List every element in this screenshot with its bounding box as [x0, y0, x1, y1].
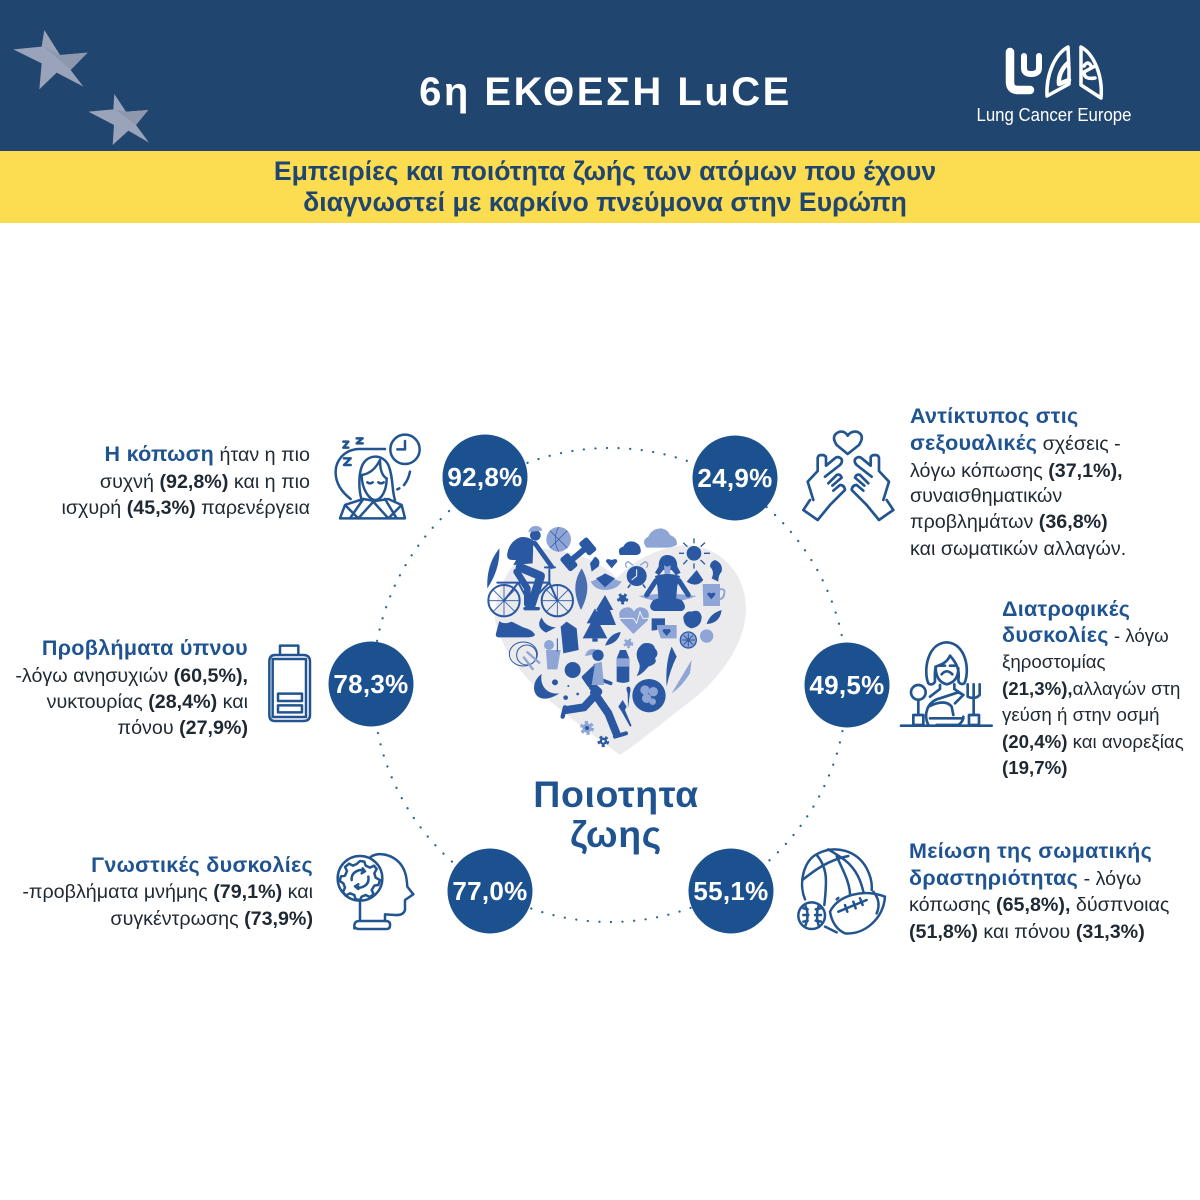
broccoli: [637, 643, 657, 676]
text: sexual relations: προβλημάτων (36,8%): [910, 511, 1108, 533]
badge: 92,8%: [442, 434, 528, 520]
ball: [565, 662, 581, 678]
central heading: [533, 773, 699, 855]
text: fatigue: συχνή (92,8%) και η πιο: [100, 471, 310, 493]
subtitle: Εμπειρίες και ποιότητα ζωής των ατόμων που έχουν: [274, 156, 936, 186]
juice glass: [544, 638, 561, 669]
logo: Lung Cancer Europe: Lung Cancer Europe: [976, 105, 1132, 125]
icon: woman eating: [901, 642, 992, 726]
badge: 49,5%: 49,5%: [809, 670, 885, 700]
trees: [583, 595, 616, 642]
icon: EU stars: [13, 30, 149, 145]
text: reduced physical activity: Μείωση της σωματικής: [909, 839, 1152, 863]
meditating woman: [639, 555, 697, 611]
text: cognitive difficulties: συγκέντρωσης (73,9%): [110, 908, 313, 930]
text: sleep problems: πόνου (27,9%): [118, 717, 248, 739]
text: nutrition difficulties: γεύση ή στην οσμή: [1002, 704, 1160, 725]
wheat: [575, 568, 587, 610]
spoon and fork: [626, 687, 631, 708]
text: sexual relations: [910, 404, 1126, 560]
plate: [632, 679, 666, 712]
smoothie: [561, 622, 579, 653]
text: nutrition difficulties: [1002, 597, 1184, 778]
text: nutrition difficulties: δυσκολίες - λόγω: [1002, 623, 1169, 647]
icon: head with gear: [338, 854, 413, 929]
badge: 78,3%: [328, 642, 414, 726]
subtitle: διαγνωστεί με καρκίνο πνεύμονα στην Ευρώπη: [303, 187, 907, 217]
heart illustration: [487, 526, 746, 755]
pea pod and carrot: [666, 647, 677, 687]
text: nutrition difficulties: ξηροστομίας: [1002, 651, 1106, 672]
badge: 77,0%: [448, 848, 532, 934]
mug: [703, 584, 724, 606]
dumbbell: [559, 537, 597, 572]
text: cognitive difficulties: Γνωστικές δυσκολίες: [91, 853, 313, 877]
speech bubbles: [652, 618, 665, 631]
leaf, flower: [605, 632, 621, 646]
subtitle band: [0, 151, 1200, 223]
bottle: [617, 650, 629, 683]
text: sexual relations: και σωματικών αλλαγών.: [910, 538, 1126, 560]
subtitle: [274, 156, 936, 217]
text: fatigue: [61, 442, 310, 519]
lotus: [591, 573, 622, 590]
text: nutrition difficulties: (21,3%),αλλαγών στη: [1002, 678, 1180, 699]
icon: low battery: [269, 646, 310, 721]
badge: 55,1%: 55,1%: [693, 876, 769, 906]
text: sexual relations: Αντίκτυπος στις: [910, 404, 1078, 428]
heart background: [495, 545, 746, 755]
text: sleep problems: Προβλήματα ύπνου: [42, 636, 248, 660]
jump rope: [509, 642, 540, 670]
flower: [619, 595, 626, 602]
badge: 49,5%: [804, 642, 890, 728]
title: 6η ΕΚΘΕΣΗ LuCE: [419, 70, 792, 114]
plant and heart: [590, 557, 599, 572]
bottom flowers: [582, 723, 592, 733]
text: fatigue: ισχυρή (45,3%) παρενέργεια: [61, 497, 310, 519]
wheat left: [487, 548, 499, 588]
runner: [563, 649, 626, 737]
orange slice and steam: [687, 570, 703, 585]
text: sexual relations: σεξουαλικές σχέσεις -: [910, 431, 1121, 455]
badge: 92,8%: 92,8%: [447, 462, 523, 492]
cyclist: [488, 526, 573, 616]
text: reduced physical activity: (51,8%) και πόνου (31,3%): [909, 921, 1145, 943]
text: reduced physical activity: [909, 839, 1169, 943]
moon and stars: [534, 674, 579, 700]
text: cognitive difficulties: [22, 853, 313, 930]
icon: sleeping woman with clock: [336, 435, 420, 518]
melon slice: [539, 617, 556, 633]
text: sleep problems: [15, 636, 248, 739]
badge: 55,1%: [688, 848, 774, 934]
clouds: [619, 541, 641, 555]
text: cognitive difficulties: -προβλήματα μνήμης (79,1%) και: [22, 881, 313, 903]
text: sleep problems: νυκτουρίας (28,4%) και: [47, 691, 248, 713]
logo: Lung Cancer Europe: [976, 47, 1132, 125]
sun: [679, 538, 710, 569]
text: reduced physical activity: κόπωσης (65,8%), δύσπνοιας: [909, 894, 1169, 916]
dotted ring: [373, 448, 847, 922]
badge: 24,9%: [692, 436, 778, 520]
icon: sports balls: [798, 849, 885, 933]
shoe: [496, 621, 535, 637]
badge: 77,0%: 77,0%: [452, 876, 528, 906]
text: sexual relations: συναισθηματικών: [910, 485, 1062, 507]
text: sleep problems: -λόγω ανησυχιών (60,5%),: [15, 665, 248, 687]
heart with pulse: [619, 607, 649, 634]
text: nutrition difficulties: (20,4%) και ανορεξίας: [1002, 731, 1184, 752]
text: nutrition difficulties: (19,7%): [1002, 757, 1067, 778]
text: reduced physical activity: δραστηριότητας - λόγω: [909, 866, 1141, 890]
text: sexual relations: λόγω κόπωσης (37,1%),: [910, 460, 1123, 482]
badge: 78,3%: 78,3%: [333, 669, 409, 699]
badge: 24,9%: 24,9%: [697, 463, 773, 493]
text: nutrition difficulties: Διατροφικές: [1002, 597, 1130, 621]
central heading: ζωης: [570, 813, 662, 855]
central heading: Ποιοτητα: [533, 773, 699, 815]
clock: [626, 562, 648, 587]
text: fatigue: Η κόπωση ήταν η πιο: [104, 442, 310, 466]
icon: hands with heart: [803, 432, 893, 520]
header band: [0, 0, 1200, 151]
apple, leaf, citrus, tomato: [683, 611, 702, 628]
basketball: [546, 527, 571, 552]
